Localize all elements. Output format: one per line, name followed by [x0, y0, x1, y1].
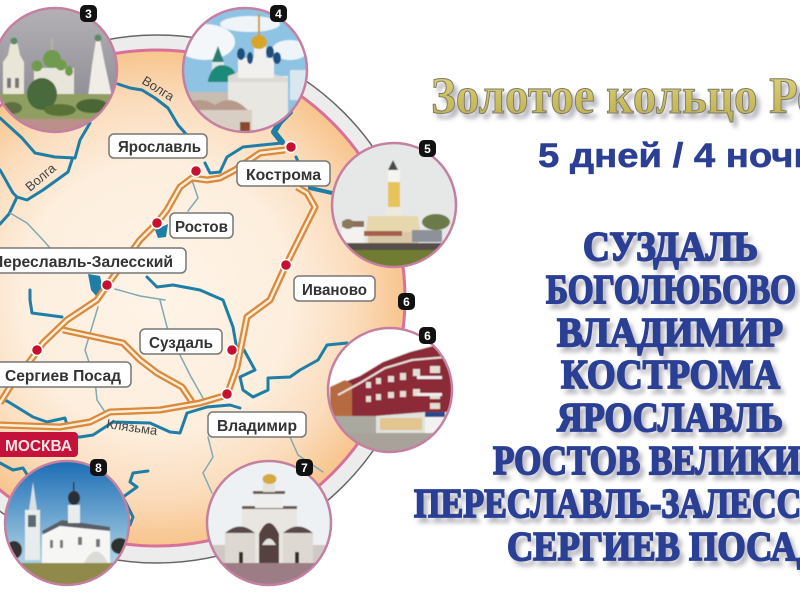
label: Иваново [294, 276, 375, 301]
number badge 4: 4 [275, 7, 282, 21]
number badge 7: 7 [301, 461, 308, 475]
city: Суздаль: СУЗДАЛЬ [583, 223, 758, 269]
number badge 5 [419, 140, 436, 157]
city: Владимир: ВЛАДИМИР [557, 309, 783, 355]
label: Москва: МОСКВА [5, 438, 72, 455]
map of the Golden Ring [0, 35, 436, 563]
label: Владимир [208, 412, 306, 437]
label: Переславль-Залесский [0, 248, 186, 273]
label: Москва [0, 432, 78, 457]
number badge 4 [270, 5, 287, 22]
label: Иваново: Иваново [302, 282, 367, 299]
photo 6: red apartment building [325, 325, 456, 455]
number badge 7 [296, 459, 313, 476]
river names: Волга [139, 73, 178, 104]
label: Ярославль: Ярославль [118, 139, 201, 156]
label: Ярославль [109, 134, 207, 158]
city: Кострома: КОСТРОМА [561, 351, 780, 397]
label: Кострома: Кострома [246, 167, 321, 184]
photo 3: church with towers [0, 5, 120, 135]
label: Кострома [237, 161, 330, 186]
number badge 6 on ring: 6 [403, 295, 410, 309]
number badge 5: 5 [424, 142, 431, 156]
river names [22, 73, 178, 438]
highways [0, 150, 315, 427]
number badge 8 [90, 459, 107, 476]
number badge 3: 3 [85, 7, 92, 21]
label: Ростов: Ростов [175, 219, 228, 236]
label: Владимир: Владимир [217, 418, 297, 435]
list of cities [414, 223, 800, 569]
label: Сергиев Посад [0, 362, 131, 387]
outer grey ring [0, 43, 413, 555]
river names: Клязьма [106, 416, 159, 438]
river names: Волга [22, 160, 59, 194]
number badge 8: 8 [95, 461, 102, 475]
number badge 6 on ring [398, 293, 415, 310]
label: Суздаль [140, 329, 222, 354]
city markers [32, 142, 296, 400]
number badge 3 [80, 5, 97, 22]
number badge 6 on photo: 6 [424, 329, 431, 343]
photo 5: Kostroma fire tower [330, 140, 460, 270]
subtitle: duration: 5 дней / 4 ночи [538, 137, 800, 175]
label: Ростов [170, 213, 233, 238]
number badge 6 on photo [419, 327, 436, 344]
photo 4: monastery with golden dome [175, 5, 310, 135]
photo 8: white church under blue sky [3, 460, 133, 590]
label: Суздаль: Суздаль [149, 335, 213, 352]
photo 7: Golden Gate of Vladimir [204, 460, 335, 590]
orange map disc [0, 50, 405, 546]
label: Сергиев Посад: Сергиев Посад [5, 368, 121, 385]
rivers [0, 84, 347, 525]
